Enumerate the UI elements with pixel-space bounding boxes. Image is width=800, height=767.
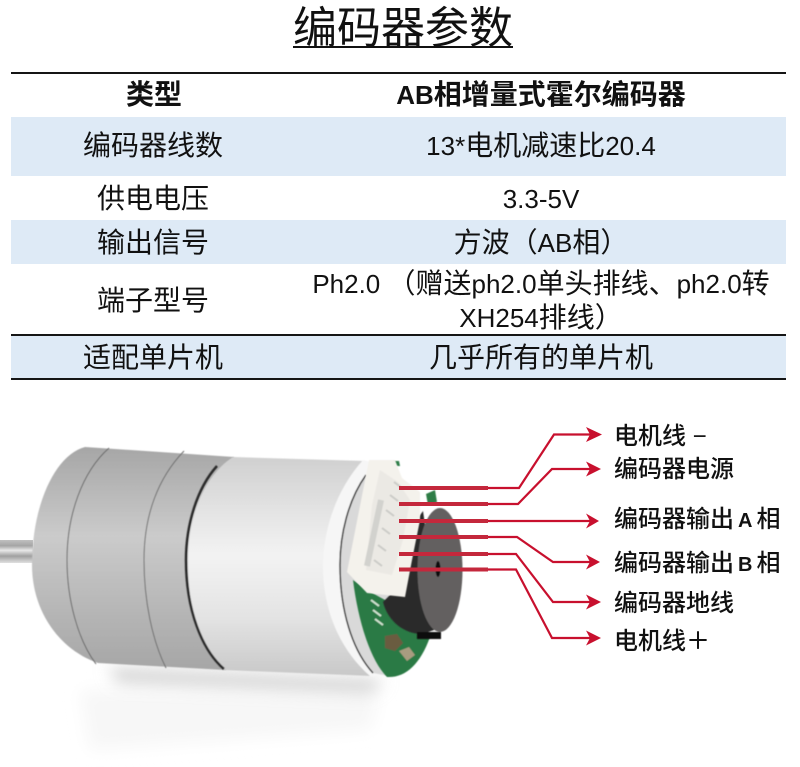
label: encoder ground: 编码器地线 [614, 590, 734, 617]
title: 编码器参数 [293, 4, 513, 53]
row value: supply voltage: 3.3-5V [503, 184, 579, 214]
row label: encoder lines: 编码器线数 [83, 130, 223, 161]
row value: terminal model: XH254排线） [459, 302, 623, 333]
row label: type: 类型 [126, 79, 182, 110]
drop shadow [80, 668, 385, 750]
wire leads [399, 427, 602, 646]
encoder board [353, 461, 437, 677]
gearbox cylinder [32, 447, 234, 670]
row value: terminal model [312, 268, 770, 333]
row value: compatible MCU: 几乎所有的单片机 [429, 342, 653, 373]
motor illustration [0, 427, 602, 711]
label: encoder power: 编码器电源 [614, 456, 734, 483]
label: encoder output B: 编码器输出B相 [614, 550, 780, 577]
panel: parameter table [11, 72, 786, 380]
motor shaft [0, 540, 33, 563]
white connector [347, 460, 420, 597]
row value: terminal model: Ph2.0 （赠送ph2.0单头排线、ph2.0转 [312, 268, 770, 299]
row value: encoder lines: 13*电机减速比20.4 [426, 130, 656, 161]
row label: compatible MCU: 适配单片机 [83, 342, 223, 373]
row label: output signal: 输出信号 [97, 227, 209, 258]
row label: supply voltage: 供电电压 [97, 183, 209, 214]
motor body cylinder [186, 457, 410, 676]
row value: output signal: 方波（AB相） [454, 227, 628, 258]
row value: type: AB相增量式霍尔编码器 [396, 79, 686, 110]
label: motor wire plus: 电机线＋ [614, 628, 710, 655]
magnetic disc [383, 508, 462, 639]
row label: terminal model: 端子型号 [97, 285, 209, 316]
label: encoder output A: 编码器输出A相 [614, 506, 780, 533]
label: motor wire minus: 电机线 − [614, 423, 707, 450]
